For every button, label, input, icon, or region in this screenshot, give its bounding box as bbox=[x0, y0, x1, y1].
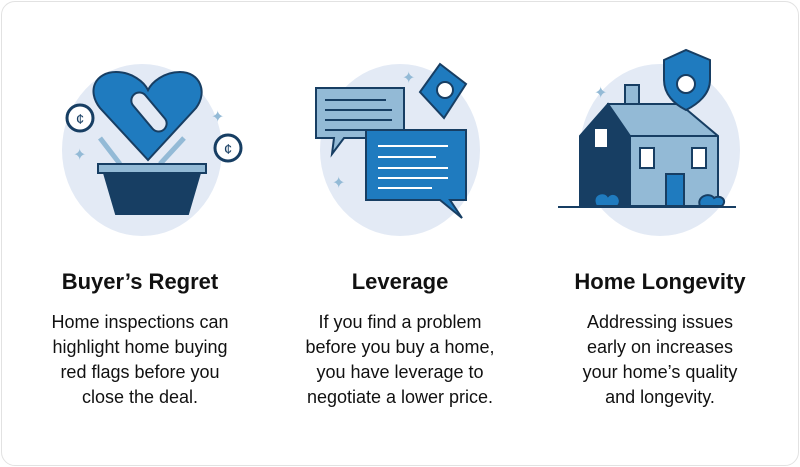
text block: Buyer's Regret: red flags before you bbox=[60, 362, 220, 382]
text block: Home Longevity: Home Longevity bbox=[574, 269, 746, 294]
text block: Leverage: before you buy a home, bbox=[305, 337, 495, 357]
text block: Buyer's Regret: close the deal. bbox=[82, 387, 198, 407]
text block: Home Longevity bbox=[574, 269, 746, 407]
text block: Leverage: Leverage bbox=[352, 269, 448, 294]
icon: basket with heart: ✦ bbox=[211, 109, 224, 126]
text block: Home Longevity: and longevity. bbox=[605, 387, 715, 407]
text block: Buyer's Regret bbox=[51, 269, 229, 407]
icon: speech bubbles and money: ✦ bbox=[402, 70, 415, 87]
text block: Home Longevity: Addressing issues bbox=[587, 312, 733, 332]
icon: basket with heart: ✦ bbox=[73, 147, 86, 164]
icon: basket with heart bbox=[62, 64, 241, 236]
icon: speech bubbles and money: ✦ bbox=[332, 175, 345, 192]
icon: basket with heart: ¢ bbox=[224, 141, 232, 158]
icon: basket with heart: ¢ bbox=[76, 111, 84, 128]
icon: house with shield bbox=[558, 50, 740, 236]
text block: Home Longevity: your home’s quality bbox=[583, 362, 737, 382]
text block: Buyer's Regret: highlight home buying bbox=[52, 337, 228, 357]
text block: Leverage: If you find a problem bbox=[318, 312, 482, 332]
text block: Home Longevity: early on increases bbox=[587, 337, 733, 357]
text block: Buyer's Regret: Buyer’s Regret bbox=[62, 269, 218, 294]
icon: speech bubbles and money bbox=[316, 64, 480, 236]
text block: Leverage bbox=[305, 269, 495, 407]
text block: Buyer's Regret: Home inspections can bbox=[51, 312, 229, 332]
text block: Leverage: negotiate a lower price. bbox=[307, 387, 493, 407]
icon: house with shield: ✦ bbox=[594, 85, 607, 102]
text block: Leverage: you have leverage to bbox=[316, 362, 484, 382]
